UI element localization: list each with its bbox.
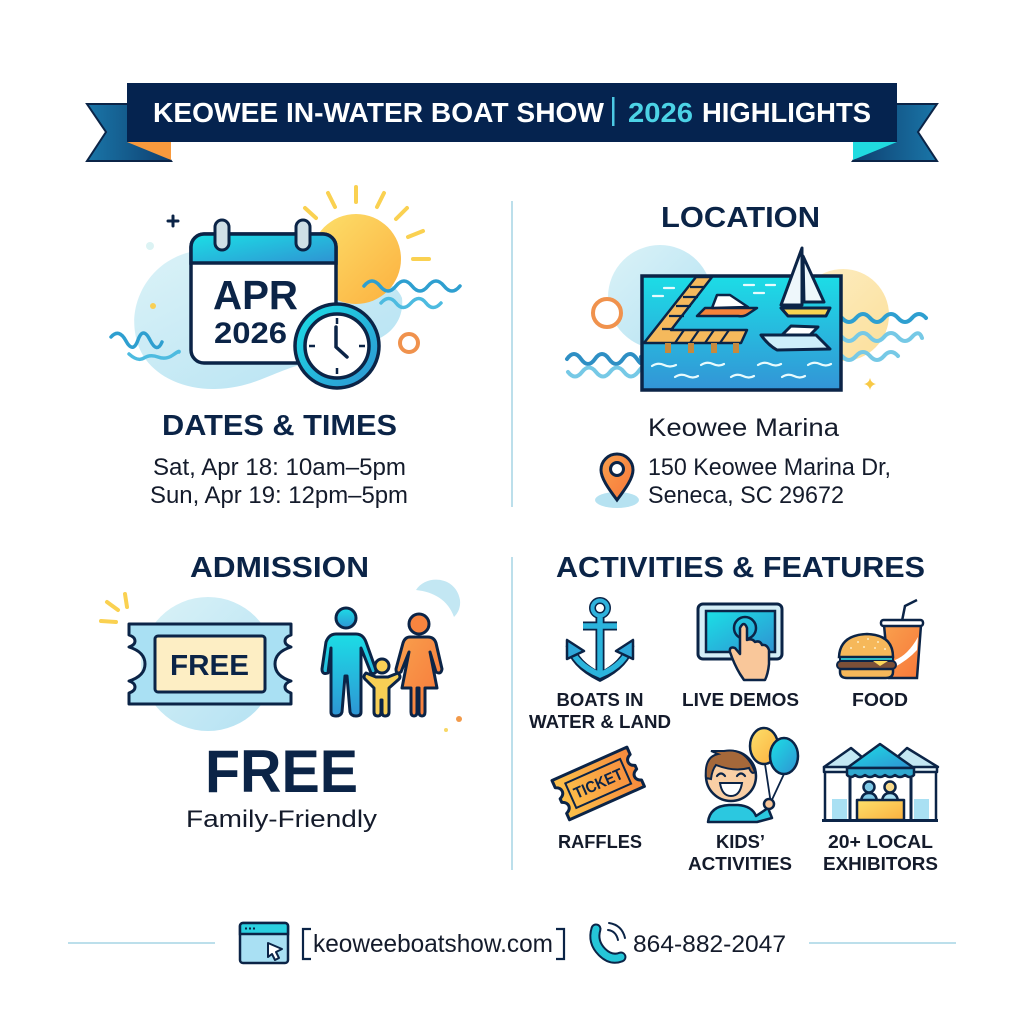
activity: boats in water and land xyxy=(529,600,671,732)
sparkle xyxy=(864,378,876,390)
banner left fold xyxy=(127,142,171,160)
label: KIDS’ xyxy=(716,831,765,852)
icon: exhibitor tents xyxy=(822,744,938,820)
icon: free ticket xyxy=(129,624,291,704)
heading: admission: ADMISSION xyxy=(190,552,369,584)
calendar body xyxy=(191,234,336,363)
heading: location: LOCATION xyxy=(661,202,820,234)
label line 2: EXHIBITORS xyxy=(823,853,938,874)
text: free: FREE xyxy=(205,738,358,805)
heading: activities and features: ACTIVITIES & FEATURES xyxy=(556,552,925,584)
yellow sparks xyxy=(101,594,127,622)
website link: keoweeboatshow.com xyxy=(313,930,553,958)
panel: location xyxy=(567,202,926,509)
yellow dot xyxy=(150,303,156,309)
father xyxy=(322,608,376,716)
icon: map pin xyxy=(595,454,639,508)
banner main bar xyxy=(127,83,897,142)
pale crescent xyxy=(416,580,460,617)
panel: dates and times xyxy=(111,187,460,509)
pale blue circle xyxy=(608,245,712,349)
pale dot xyxy=(146,242,154,250)
child xyxy=(364,659,400,716)
icon: burger and drink xyxy=(837,600,923,678)
footer xyxy=(68,923,956,963)
banner title text: HIGHLIGHTS xyxy=(702,97,871,128)
icon: free ticket: FREE xyxy=(170,650,249,682)
mother xyxy=(396,614,442,716)
title banner xyxy=(87,83,937,161)
icon: tablet with touch hand xyxy=(698,604,782,680)
illustration: calendar with sun, waves and clock xyxy=(111,187,460,389)
banner left ribbon tail xyxy=(87,104,171,161)
icon: child with balloons xyxy=(706,728,798,822)
label: LIVE DEMOS xyxy=(682,689,799,710)
pale circle xyxy=(141,597,275,731)
icon: family xyxy=(322,608,442,716)
white motor yacht xyxy=(761,326,830,350)
heading: dates and times: DATES & TIMES xyxy=(162,410,397,442)
banner title text xyxy=(153,97,871,128)
water rectangle xyxy=(642,276,841,390)
text: saturday hours: Sat, Apr 18: 10am–5pm xyxy=(153,454,406,481)
sun rays xyxy=(305,187,429,259)
text: sunday hours: Sun, Apr 19: 12pm–5pm xyxy=(150,482,408,509)
icon: phone xyxy=(595,923,625,958)
icon: raffle ticket: TICKET xyxy=(571,766,626,803)
text: family-friendly: Family-Friendly xyxy=(186,806,377,833)
activity: food xyxy=(837,600,923,710)
illustration: marina map xyxy=(567,245,926,390)
text: city: Seneca, SC 29672 xyxy=(648,482,844,509)
orange ring xyxy=(400,334,418,352)
dock xyxy=(644,277,747,353)
banner title text: 2026 xyxy=(628,97,693,128)
label: 20+ LOCAL xyxy=(828,831,933,852)
label: BOATS IN xyxy=(556,689,644,710)
white sailboat xyxy=(781,248,830,316)
orange ring xyxy=(593,299,621,327)
calendar rings xyxy=(215,220,229,250)
activity: live demos xyxy=(682,604,799,710)
phone number: 864-882-2047 xyxy=(633,931,786,958)
panel: admission xyxy=(101,552,462,833)
yellow dot xyxy=(444,728,448,732)
outer waves xyxy=(567,314,926,376)
waves xyxy=(111,281,460,359)
pale sun circle xyxy=(797,269,889,361)
label: RAFFLES xyxy=(558,831,642,852)
calendar year: 2026 xyxy=(214,317,287,350)
banner right ribbon tail xyxy=(853,104,937,161)
label line 2: WATER & LAND xyxy=(529,711,671,732)
background blob xyxy=(134,252,402,389)
icon: browser window xyxy=(240,923,288,963)
activity: kids' activities xyxy=(688,728,798,874)
text: street address: 150 Keowee Marina Dr, xyxy=(648,454,891,481)
calendar month: APR xyxy=(213,272,298,318)
activity: local exhibitors xyxy=(822,744,938,874)
calendar header xyxy=(191,234,336,263)
clock xyxy=(295,304,379,388)
orange motor yacht xyxy=(697,295,757,316)
label: FOOD xyxy=(852,689,908,710)
activity: raffles xyxy=(552,747,644,852)
banner title text: KEOWEE IN-WATER BOAT SHOW xyxy=(153,97,604,128)
water ripples xyxy=(652,285,831,378)
plus sparkle xyxy=(168,216,178,226)
orange dot xyxy=(456,716,462,722)
banner right fold xyxy=(853,142,897,160)
icon: anchor xyxy=(567,600,633,678)
sun xyxy=(311,214,401,304)
text: venue name: Keowee Marina xyxy=(648,414,839,442)
label line 2: ACTIVITIES xyxy=(688,853,792,874)
panel: activities and features xyxy=(529,552,938,874)
